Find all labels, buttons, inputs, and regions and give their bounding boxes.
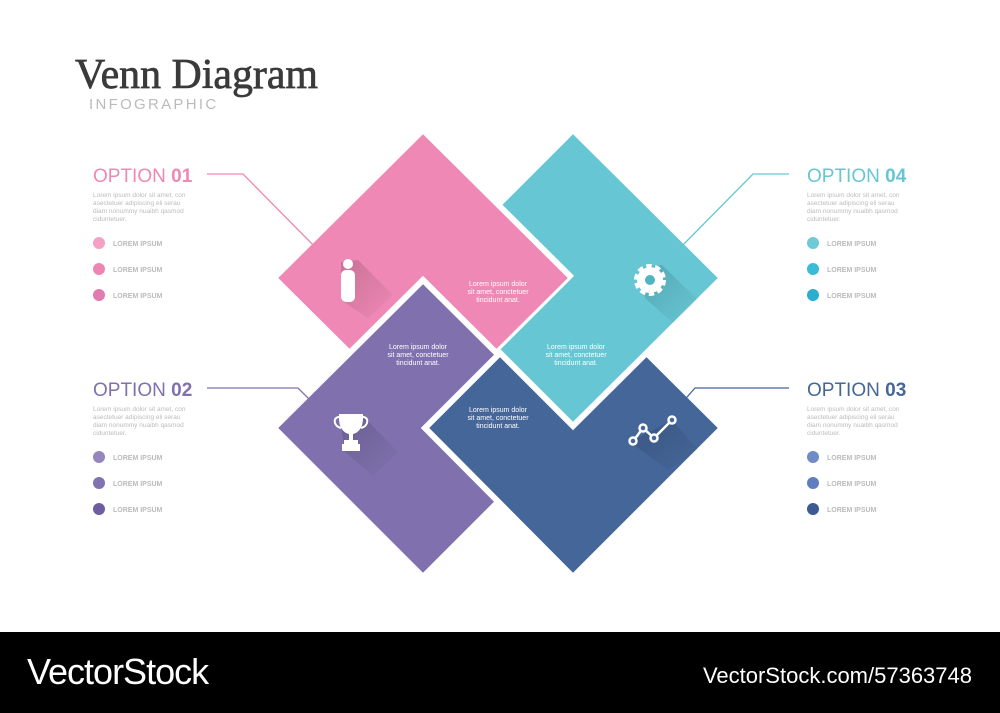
diamond texts: Lorem ipsum dolor xyxy=(469,407,528,414)
icon: gear xyxy=(637,267,663,293)
panel: option 02: Lorem ipsum dolor sit amet, con xyxy=(93,406,186,413)
diamond: teal xyxy=(425,130,722,426)
footer: VectorStock xyxy=(27,651,210,692)
panel: option 01: LOREM IPSUM xyxy=(113,293,163,300)
diamond texts: Lorem ipsum dolor xyxy=(547,344,606,351)
panel: option 04: diam nonummy nuaibh qasmod xyxy=(807,208,898,215)
panel: option 03 xyxy=(807,380,906,515)
diamond texts: tincidunt anat. xyxy=(476,297,520,304)
icon: trophy xyxy=(335,414,367,451)
diamond texts: sit amet, conctetuer xyxy=(545,352,607,359)
diamond: navy xyxy=(425,280,722,577)
panel: option 03: OPTION 03 xyxy=(807,380,906,401)
diamond texts: sit amet, conctetuer xyxy=(387,352,449,359)
panel: option 03: Lorem ipsum dolor sit amet, con xyxy=(807,406,900,413)
panel: option 04: LOREM IPSUM xyxy=(827,293,877,300)
footer xyxy=(0,632,1000,713)
diamond texts: sit amet, conctetuer xyxy=(467,289,529,296)
panel: option 04: LOREM IPSUM xyxy=(827,267,877,274)
diamond texts: sit amet, conctetuer xyxy=(467,415,529,422)
panel: option 01: LOREM IPSUM xyxy=(113,241,163,248)
panel: option 02 xyxy=(93,380,192,515)
panel: option 03: diam nonummy nuaibh qasmod xyxy=(807,422,898,429)
panel: option 02: ciduntetuer. xyxy=(93,430,127,437)
panel: option 04: LOREM IPSUM xyxy=(827,241,877,248)
title: Venn Diagram xyxy=(75,52,318,98)
panel: option 01: OPTION 01 xyxy=(93,166,193,187)
panel: option 03: asectetuer adipiscing eli serau xyxy=(807,414,895,421)
diamond texts: Lorem ipsum dolor xyxy=(469,281,528,288)
panel: option 03: LOREM IPSUM xyxy=(827,507,877,514)
venn diagram xyxy=(274,130,722,577)
diamond texts: tincidunt anat. xyxy=(554,360,598,367)
diamond texts: tincidunt anat. xyxy=(396,360,440,367)
icon: person xyxy=(341,259,355,302)
diamond texts xyxy=(387,281,607,430)
panel: option 03: LOREM IPSUM xyxy=(827,481,877,488)
panel: option 02: OPTION 02 xyxy=(93,380,192,401)
panel: option 03: ciduntetuer. xyxy=(807,430,841,437)
diamond texts: tincidunt anat. xyxy=(476,423,520,430)
panel: option 01: Lorem ipsum dolor sit amet, con xyxy=(93,192,186,199)
panel: option 01: LOREM IPSUM xyxy=(113,267,163,274)
panel: option 01 xyxy=(93,166,193,301)
panel: option 02: LOREM IPSUM xyxy=(113,455,163,462)
panel: option 04 xyxy=(807,166,907,301)
icon shadows xyxy=(340,260,698,476)
diamond: pink xyxy=(274,130,572,426)
panel: option 04: ciduntetuer. xyxy=(807,216,841,223)
connector lines xyxy=(207,174,789,406)
footer: VectorStock.com/57363748 xyxy=(703,663,972,688)
panel: option 02: LOREM IPSUM xyxy=(113,507,163,514)
panel: option 02: LOREM IPSUM xyxy=(113,481,163,488)
diamond texts: Lorem ipsum dolor xyxy=(389,344,448,351)
panel: option 02: asectetuer adipiscing eli serau xyxy=(93,414,181,421)
title: INFOGRAPHIC xyxy=(89,96,218,113)
diamond: purple xyxy=(274,280,572,577)
panel: option 01: diam nonummy nuaibh qasmod xyxy=(93,208,184,215)
panel: option 04: OPTION 04 xyxy=(807,166,907,187)
icon: line chart xyxy=(630,416,676,444)
panel: option 03: LOREM IPSUM xyxy=(827,455,877,462)
panel: option 01: asectetuer adipiscing eli serau xyxy=(93,200,181,207)
panel: option 04: asectetuer adipiscing eli serau xyxy=(807,200,895,207)
diamond: teal overlap xyxy=(498,276,646,430)
panel: option 01: ciduntetuer. xyxy=(93,216,127,223)
panel: option 04: Lorem ipsum dolor sit amet, con xyxy=(807,192,900,199)
panel: option 02: diam nonummy nuaibh qasmod xyxy=(93,422,184,429)
